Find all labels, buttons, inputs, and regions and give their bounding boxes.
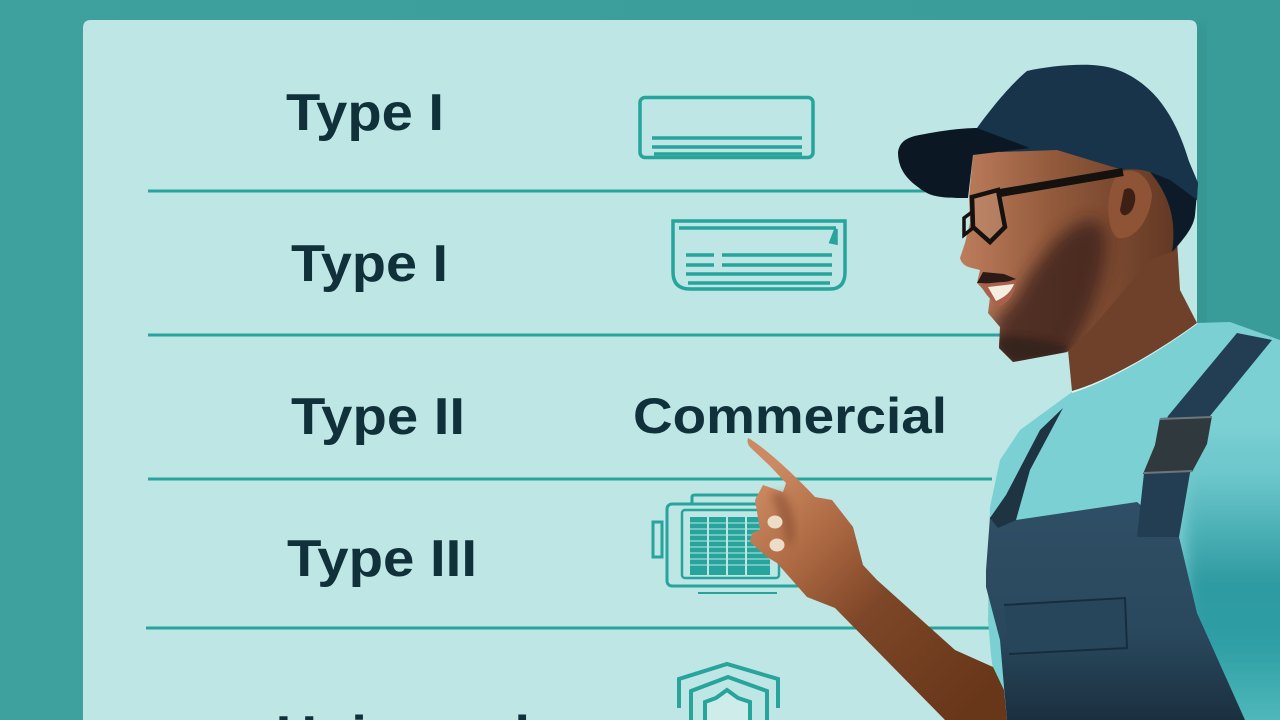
left thin strap (990, 408, 1063, 528)
fingernails (768, 516, 784, 552)
illustration: technician pointing (748, 65, 1280, 720)
cap brim shade (898, 128, 1030, 198)
row 4 label: Type III: Type III (287, 530, 477, 588)
smile (980, 281, 1016, 306)
right strap (1137, 333, 1272, 537)
icon: wall-mounted air conditioner (640, 98, 813, 158)
cap (898, 65, 1198, 252)
arm and hand (748, 438, 1007, 720)
shirt (988, 322, 1280, 720)
icon: commercial condenser unit (653, 495, 802, 593)
neck (1067, 200, 1197, 391)
beard (995, 220, 1106, 368)
head (960, 130, 1177, 362)
collar trim (1072, 323, 1197, 392)
glasses (964, 172, 1123, 242)
row 3 value: Commercial: Commercial (633, 388, 947, 444)
icon: layered shield (679, 664, 778, 720)
icon: split air conditioner with vents (673, 221, 845, 289)
buckle (1143, 416, 1212, 474)
pocket (1004, 598, 1127, 654)
mustache (977, 272, 1016, 284)
ear (1108, 171, 1152, 238)
row 3 label: Type II: Type II (291, 388, 465, 446)
row 2 label: Type I: Type I (291, 235, 448, 293)
apron bib (986, 502, 1245, 720)
row 1 label: Type I: Type I (286, 84, 444, 142)
